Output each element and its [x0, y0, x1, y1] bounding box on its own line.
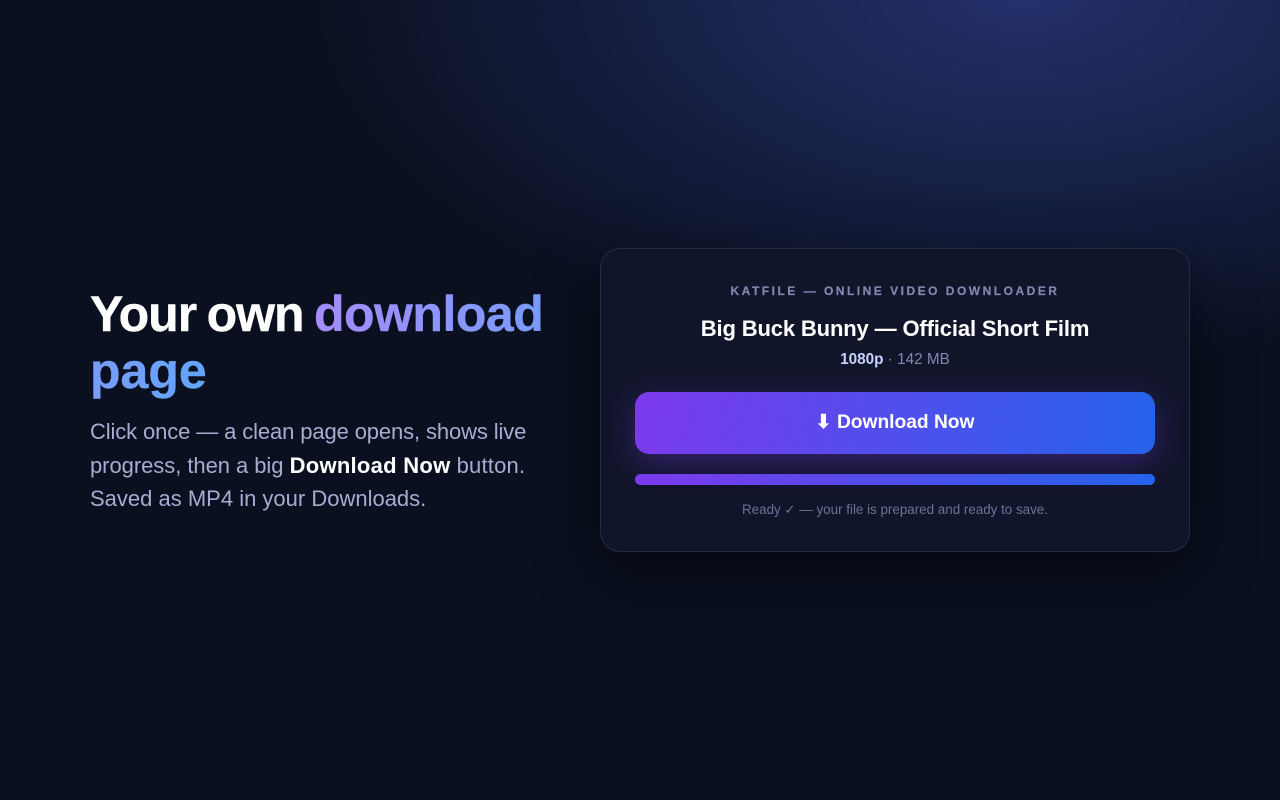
- download button: ⬇ Download Now: [816, 412, 974, 433]
- description: progress, then a big Download Now button.: [90, 453, 525, 478]
- description: [90, 419, 526, 511]
- description: Click once — a clean page opens, shows live: [90, 419, 526, 444]
- eyebrow label: KATFILE — ONLINE VIDEO DOWNLOADER: [731, 284, 1059, 298]
- hero text block: [90, 286, 543, 511]
- video title: Big Buck Bunny — Official Short Film: [701, 316, 1089, 341]
- description: Saved as MP4 in your Downloads.: [90, 486, 426, 511]
- heading: [90, 286, 543, 399]
- panel: download card: [600, 248, 1190, 552]
- download button: [635, 392, 1155, 454]
- file meta: 1080p · 142 MB: [840, 351, 950, 368]
- status text: Ready ✓ — your file is prepared and ready to save.: [742, 502, 1048, 517]
- progress bar: [635, 474, 1155, 485]
- heading: Your own download: [90, 286, 543, 342]
